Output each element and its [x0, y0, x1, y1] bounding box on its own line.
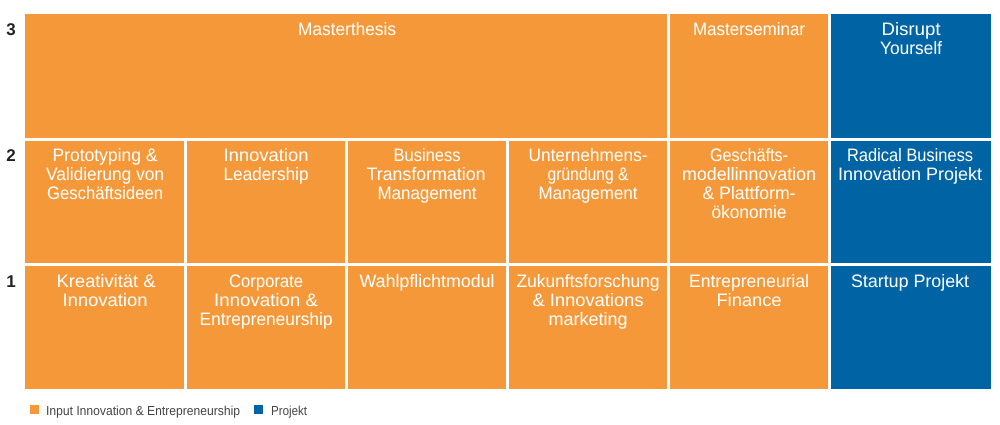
module: Prototyping: [25, 141, 184, 263]
module: Kreativität: Kreativität &: [56, 271, 156, 291]
module: Corporate Innovation: [187, 266, 345, 389]
project: Startup Projekt: [831, 266, 991, 389]
project: Disrupt Yourself: Yourself: [880, 38, 943, 58]
module: Geschäftsmodellinnovation: Geschäfts-: [710, 145, 788, 165]
module: Wahlpflichtmodul: [348, 266, 506, 389]
module: Geschäftsmodellinnovation: modellinnovation: [682, 164, 816, 184]
module: Unternehmensgründung: [509, 141, 667, 263]
module: Kreativität: [25, 266, 184, 389]
legend item: Input: Input Innovation & Entrepreneurship: [46, 403, 240, 418]
row number 3: 3: [6, 20, 16, 39]
module: Zukunftsforschung: & Innovations: [532, 290, 644, 310]
module: Prototyping: Geschäftsideen: [47, 183, 163, 203]
project: Radical Business Innovation: Innovation Projekt: [838, 164, 982, 184]
legend item: Projekt: Projekt: [271, 403, 307, 418]
module: Innovation Leadership: [187, 141, 345, 263]
module: Prototyping: Prototyping &: [52, 145, 158, 165]
row number 1: 1: [6, 272, 16, 291]
module: Corporate Innovation: Entrepreneurship: [200, 309, 332, 329]
module: Business Transformation Management: Management: [378, 183, 476, 203]
module: Zukunftsforschung: Zukunftsforschung: [516, 271, 660, 291]
module: Business Transformation Management: Transformation: [366, 164, 486, 184]
module: Entrepreneurial Finance: [670, 266, 828, 389]
module: Kreativität: Innovation: [62, 290, 148, 310]
module: Geschäftsmodellinnovation: [670, 141, 828, 263]
module: Masterseminar: [670, 14, 828, 138]
module: Masterseminar: Masterseminar: [693, 19, 805, 39]
module: Unternehmensgründung: Unternehmens-: [528, 145, 648, 165]
module: Business Transformation Management: Business: [394, 145, 460, 165]
module: Entrepreneurial Finance: Finance: [716, 290, 782, 310]
module: Unternehmensgründung: gründung &: [548, 164, 628, 184]
legend item: Projekt: [254, 403, 307, 418]
module: Unternehmensgründung: Management: [538, 183, 638, 203]
project: Radical Business Innovation: [831, 141, 991, 263]
module: Corporate Innovation: Corporate: [229, 271, 303, 291]
module: Innovation Leadership: Leadership: [224, 164, 308, 184]
module: Zukunftsforschung: [509, 266, 667, 389]
project: Disrupt Yourself: [831, 14, 991, 138]
module: Prototyping: Validierung von: [46, 164, 164, 184]
module: Innovation Leadership: Innovation: [224, 145, 308, 165]
module: Geschäftsmodellinnovation: & Plattform-: [702, 183, 796, 203]
module: Masterthesis: Masterthesis: [298, 19, 396, 39]
project: Startup Projekt: Startup Projekt: [851, 271, 969, 291]
row number 2: 2: [6, 146, 16, 165]
module: Business Transformation Management: [348, 141, 506, 263]
legend: [30, 403, 307, 418]
module: Entrepreneurial Finance: Entrepreneurial: [689, 271, 809, 291]
module: Geschäftsmodellinnovation: ökonomie: [712, 202, 786, 222]
module: Wahlpflichtmodul: Wahlpflichtmodul: [360, 271, 494, 291]
project: Disrupt Yourself: Disrupt: [882, 19, 940, 39]
module: Masterthesis: [25, 14, 667, 138]
module: Corporate Innovation: Innovation &: [214, 290, 318, 310]
module: Zukunftsforschung: marketing: [548, 309, 628, 329]
project: Radical Business Innovation: Radical Business: [847, 145, 973, 165]
